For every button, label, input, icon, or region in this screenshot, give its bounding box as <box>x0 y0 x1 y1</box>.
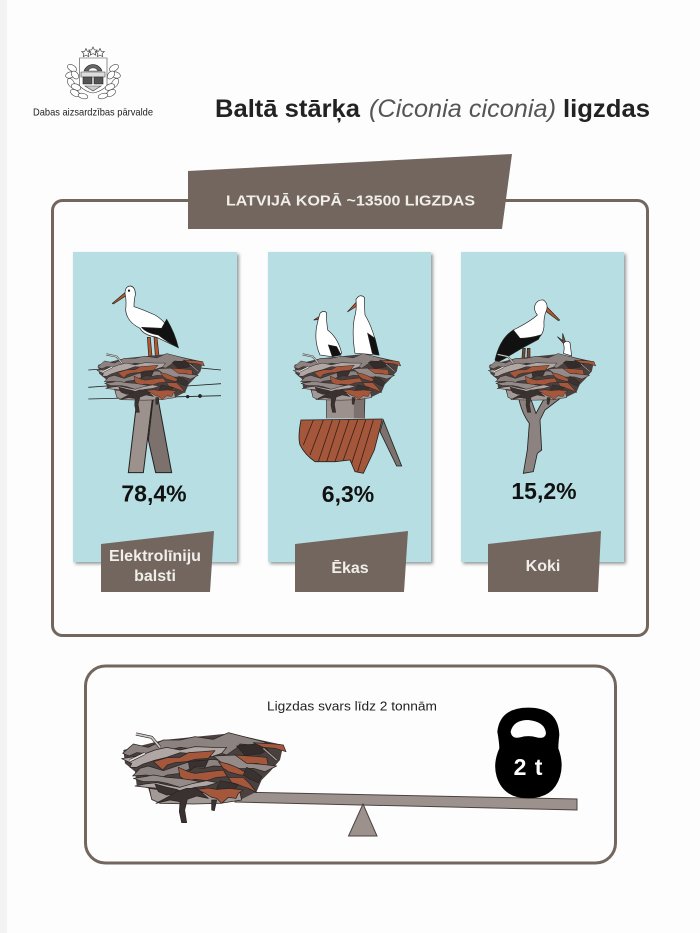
banner: total nests: LATVIJĀ KOPĀ ~13500 LIGZDAS <box>226 192 475 210</box>
banner: total nests <box>188 154 512 229</box>
label: trees: Koki <box>526 558 560 575</box>
logo: Dabas aizsardzības pārvalde <box>33 47 153 118</box>
label: buildings: Ēkas <box>331 558 369 577</box>
panel: nest locations <box>52 200 648 636</box>
kettlebell: 2 t <box>495 708 562 798</box>
card: power line poles <box>73 252 237 592</box>
panel: nest weight <box>86 666 616 863</box>
scale fulcrum <box>348 804 377 836</box>
percentage: 78,4%: 78,4% <box>121 480 187 506</box>
title: Baltā stārķa <box>215 95 361 123</box>
large nest <box>122 733 286 823</box>
kettlebell: 2 t: 2 t <box>514 754 543 780</box>
card: buildings <box>268 252 431 592</box>
logo caption: Dabas aizsardzības pārvalde <box>33 106 153 118</box>
percentage: 6,3%: 6,3% <box>322 481 374 507</box>
weight caption: Ligzdas svars līdz 2 tonnām <box>267 700 437 714</box>
icon: stork on nest on pole <box>88 286 221 473</box>
icon: coat of arms <box>65 47 121 100</box>
card: trees <box>461 252 624 592</box>
label: power line poles <box>101 531 214 592</box>
label: power line poles: balsti <box>134 568 176 585</box>
icon: stork and chick on nest in tree <box>488 300 596 473</box>
label: buildings <box>295 531 408 592</box>
scale beam <box>235 792 577 810</box>
icon: storks on nest on chimney <box>293 296 402 473</box>
label: trees <box>488 531 601 592</box>
title: (Ciconia ciconia) <box>369 95 556 123</box>
page edge <box>0 0 7 933</box>
percentage: 15,2%: 15,2% <box>511 478 577 504</box>
title: ligzdas <box>563 95 650 123</box>
title <box>215 95 650 123</box>
label: power line poles: Elektrolīniju <box>109 548 201 565</box>
